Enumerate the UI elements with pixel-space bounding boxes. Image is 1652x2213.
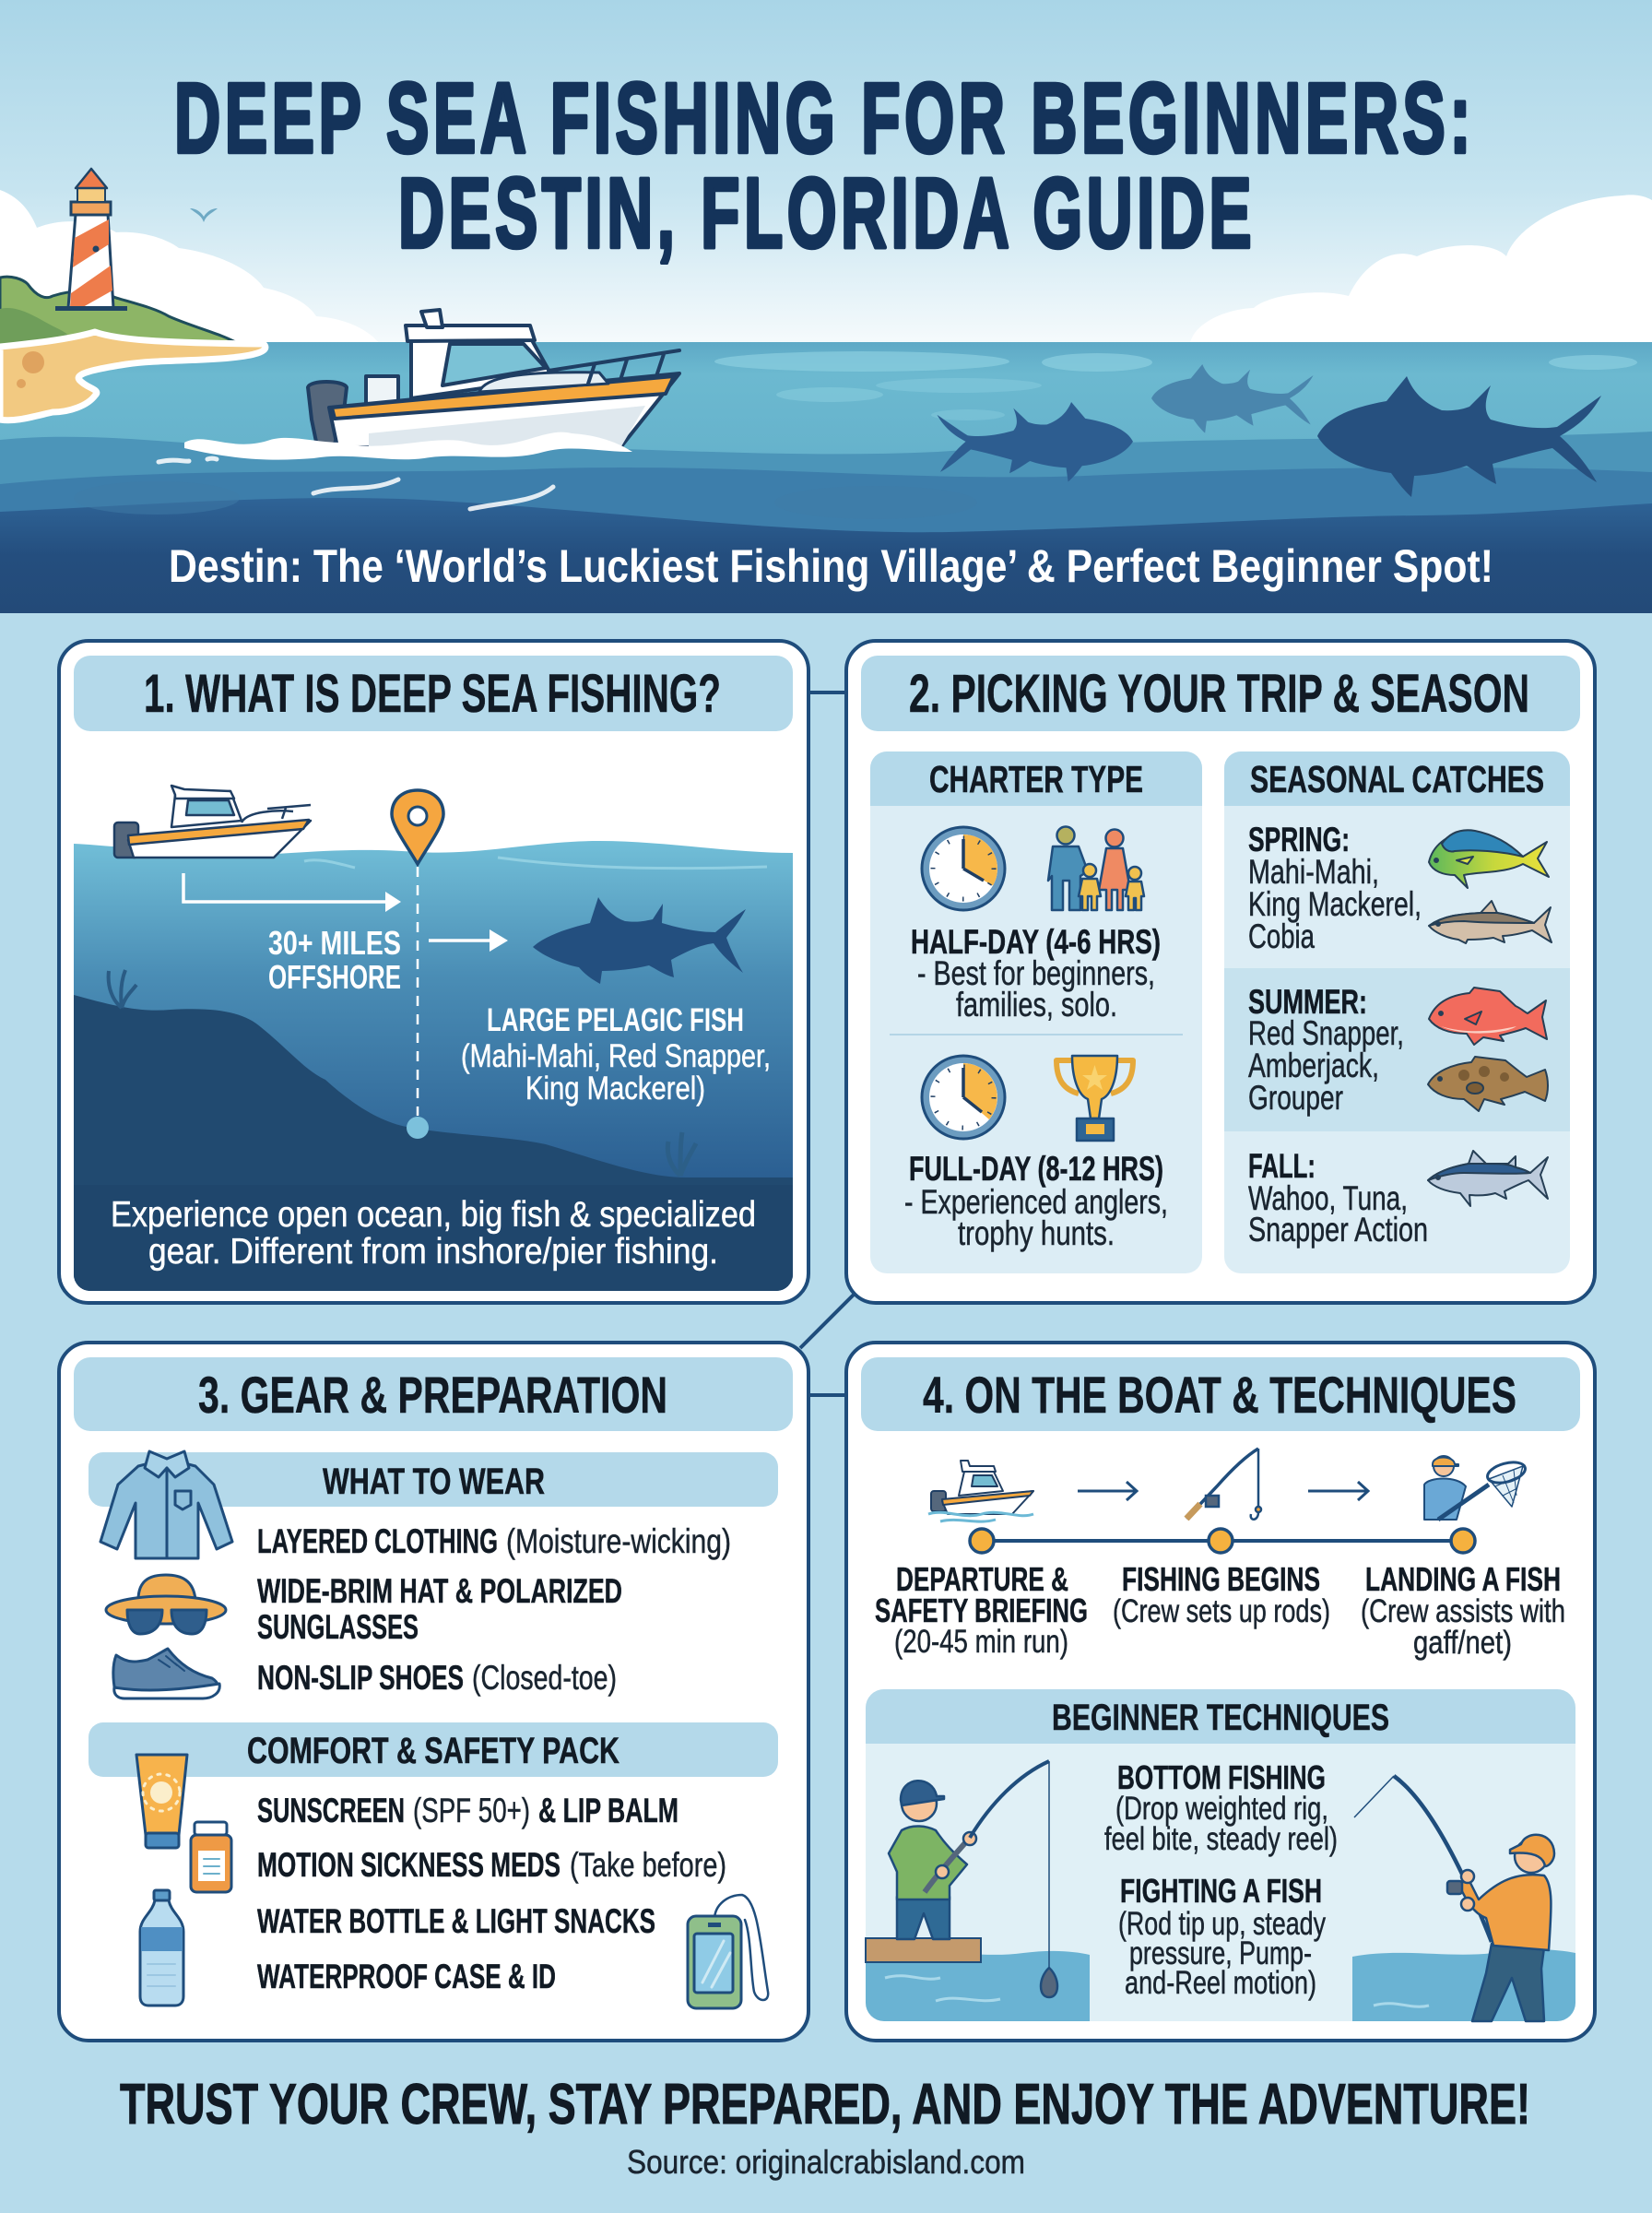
full-day text: FULL-DAY (8-12 HRS) xyxy=(909,1150,1163,1188)
depth line xyxy=(417,867,419,1116)
icon: trophy xyxy=(1056,1056,1133,1141)
label: pelagic fish: King Mackerel) xyxy=(525,1071,705,1106)
timeline xyxy=(970,1529,1475,1553)
icon: mahi-mahi xyxy=(1429,830,1549,888)
beginner techniques box xyxy=(866,1689,1575,2021)
pack list: & LIP BALM xyxy=(538,1792,678,1829)
spring text: SPRING: xyxy=(1248,821,1350,858)
full-day text: trophy hunts. xyxy=(958,1214,1115,1252)
step 3 text xyxy=(1361,1560,1565,1661)
arrow xyxy=(1078,1482,1137,1500)
icon: bird xyxy=(190,208,218,222)
icon: shirt xyxy=(100,1451,232,1558)
figure: bottom fishing angler xyxy=(889,1761,1057,1997)
beginner techniques box: BEGINNER TECHNIQUES xyxy=(1052,1698,1389,1738)
fall text xyxy=(1248,1147,1428,1249)
technique: fighting a fish: pressure, Pump- xyxy=(1129,1935,1312,1971)
icon: grouper xyxy=(1428,1057,1548,1111)
comfort band: COMFORT & SAFETY PACK xyxy=(247,1731,620,1771)
spring text xyxy=(1248,821,1422,955)
icon: water bottle xyxy=(140,1890,183,2006)
fall text: Snapper Action xyxy=(1248,1211,1428,1249)
panel 3: gear and preparation xyxy=(59,1343,808,2041)
step 1 text xyxy=(875,1560,1088,1660)
technique: fighting a fish: (Rod tip up, steady xyxy=(1118,1906,1326,1942)
technique: fighting a fish: FIGHTING A FISH xyxy=(1120,1872,1322,1910)
icon: sunscreen tube xyxy=(136,1755,187,1848)
icon: charter boat xyxy=(159,310,679,509)
technique: fighting a fish xyxy=(1118,1872,1326,2001)
depth marker xyxy=(407,1117,429,1139)
connector lines xyxy=(800,692,857,1395)
panel 1 heading xyxy=(74,656,793,731)
charter type column xyxy=(870,751,1202,1273)
comfort band xyxy=(88,1722,778,1777)
water left and right xyxy=(866,1949,1575,2021)
wear list: NON-SLIP SHOES xyxy=(257,1659,464,1697)
step 2 text: FISHING BEGINS xyxy=(1122,1560,1320,1598)
summer text: Grouper xyxy=(1248,1079,1343,1117)
icon: location pin xyxy=(392,790,443,864)
pack list: WATERPROOF CASE & ID xyxy=(257,1958,556,1995)
wear list: WIDE-BRIM HAT & POLARIZED xyxy=(257,1572,622,1610)
figure: angler fighting a fish xyxy=(1354,1776,1554,2021)
technique: bottom fishing: feel bite, steady reel) xyxy=(1104,1821,1338,1857)
step 1 text: (20-45 min run) xyxy=(894,1624,1068,1660)
label: offshore distance: 30+ MILES xyxy=(268,924,401,962)
technique: bottom fishing: (Drop weighted rig, xyxy=(1115,1791,1328,1827)
label: pelagic fish xyxy=(461,1002,771,1106)
wear list: SUNGLASSES xyxy=(257,1608,419,1646)
panel 3 heading: 3. GEAR & PREPARATION xyxy=(198,1366,667,1424)
step 3 text: (Crew assists with xyxy=(1361,1593,1565,1629)
icon: pelagic fish xyxy=(533,897,746,984)
icon: crew with net xyxy=(1424,1456,1528,1520)
icon: half-day clock xyxy=(922,827,1005,910)
panel 1 description xyxy=(111,1195,756,1272)
seasonal catches column xyxy=(1224,751,1570,1273)
icon: red snapper xyxy=(1429,988,1547,1045)
step 2 text xyxy=(1113,1560,1330,1629)
technique: fighting a fish: and-Reel motion) xyxy=(1125,1965,1316,2001)
half-day text xyxy=(911,923,1161,1024)
icon: fishing rod xyxy=(1186,1449,1261,1520)
what to wear band xyxy=(88,1452,778,1507)
sea xyxy=(0,342,1652,613)
technique: bottom fishing xyxy=(1104,1758,1338,1857)
panel 1 heading: 1. WHAT IS DEEP SEA FISHING? xyxy=(144,664,721,724)
full-day text: - Experienced anglers, xyxy=(904,1183,1168,1221)
full-day text xyxy=(904,1150,1168,1252)
technique: bottom fishing: BOTTOM FISHING xyxy=(1117,1758,1326,1796)
source line: Source: originalcrabisland.com xyxy=(627,2143,1025,2181)
panel 4 heading xyxy=(861,1357,1580,1431)
wear list: LAYERED CLOTHING xyxy=(257,1522,498,1560)
panel 3 heading xyxy=(74,1357,793,1431)
summer text: Amberjack, xyxy=(1248,1047,1379,1084)
title xyxy=(174,62,1475,268)
arrow to fish xyxy=(429,929,508,952)
hero banner xyxy=(0,0,1652,613)
pack list: MOTION SICKNESS MEDS xyxy=(257,1846,560,1884)
fish silhouettes xyxy=(937,364,1601,497)
summer text: SUMMER: xyxy=(1248,983,1367,1021)
wear list xyxy=(257,1522,731,1697)
icon: shoe xyxy=(113,1649,219,1698)
icon: small boat xyxy=(114,786,311,858)
seasonal catches column: SEASONAL CATCHES xyxy=(1250,758,1544,800)
icon: family xyxy=(1048,826,1144,910)
label: offshore distance xyxy=(268,924,401,996)
fall text: Wahoo, Tuna, xyxy=(1248,1179,1408,1217)
summer text: Red Snapper, xyxy=(1248,1014,1404,1052)
charter type column: CHARTER TYPE xyxy=(929,758,1143,800)
panel 2 heading xyxy=(861,656,1580,731)
pack list: WATER BOTTLE & LIGHT SNACKS xyxy=(257,1902,655,1940)
spring text: King Mackerel, xyxy=(1248,885,1422,923)
dock xyxy=(866,1938,981,1962)
pack list: (Take before) xyxy=(570,1846,726,1884)
step 1 text: SAFETY BRIEFING xyxy=(875,1592,1088,1629)
icon: tuna xyxy=(1428,1151,1548,1206)
coast and lighthouse xyxy=(0,169,266,420)
fall text: FALL: xyxy=(1248,1147,1316,1185)
icon: cobia xyxy=(1429,901,1552,943)
pack list: (SPF 50+) xyxy=(413,1792,530,1829)
label: pelagic fish: LARGE PELAGIC FISH xyxy=(487,1002,744,1038)
icon: waterproof phone case xyxy=(688,1895,768,2008)
arrow xyxy=(1308,1482,1368,1500)
pack list xyxy=(257,1792,726,1995)
pack list: SUNSCREEN xyxy=(257,1792,405,1829)
step 2 text: (Crew sets up rods) xyxy=(1113,1593,1330,1629)
half-day text: families, solo. xyxy=(956,986,1117,1024)
step 3 text: LANDING A FISH xyxy=(1365,1560,1561,1598)
ocean cross-section xyxy=(74,841,793,1291)
icon: departure boat xyxy=(928,1461,1033,1521)
panel 1: what is deep sea fishing xyxy=(59,641,808,1303)
cloud right xyxy=(1190,195,1652,343)
cloud left xyxy=(0,190,379,343)
panel 2: picking your trip and season xyxy=(846,641,1595,1303)
step 1 text: DEPARTURE & xyxy=(896,1560,1068,1598)
what to wear band: WHAT TO WEAR xyxy=(323,1462,545,1502)
panel 4: on the boat and techniques xyxy=(846,1343,1595,2041)
label: pelagic fish: (Mahi-Mahi, Red Snapper, xyxy=(461,1038,771,1074)
wear list: (Closed-toe) xyxy=(472,1659,617,1697)
icon: full-day clock xyxy=(922,1056,1005,1139)
icon: medicine bottle xyxy=(191,1822,231,1892)
half-day text: - Best for beginners, xyxy=(917,954,1155,992)
step 3 text: gaff/net) xyxy=(1413,1625,1512,1661)
wear list: (Moisture-wicking) xyxy=(506,1522,731,1560)
sky xyxy=(0,0,1652,343)
spring text: Mahi-Mahi, xyxy=(1248,853,1379,891)
icon: hat and sunglasses xyxy=(106,1575,226,1634)
distance arrow xyxy=(183,873,401,912)
panel 1 description: gear. Different from inshore/pier fishing. xyxy=(148,1232,718,1272)
panel 1 description: Experience open ocean, big fish & specialized xyxy=(111,1195,756,1235)
spring text: Cobia xyxy=(1248,917,1315,955)
label: offshore distance: OFFSHORE xyxy=(268,958,401,996)
summer text xyxy=(1248,983,1404,1117)
half-day text: HALF-DAY (4-6 HRS) xyxy=(911,923,1161,961)
